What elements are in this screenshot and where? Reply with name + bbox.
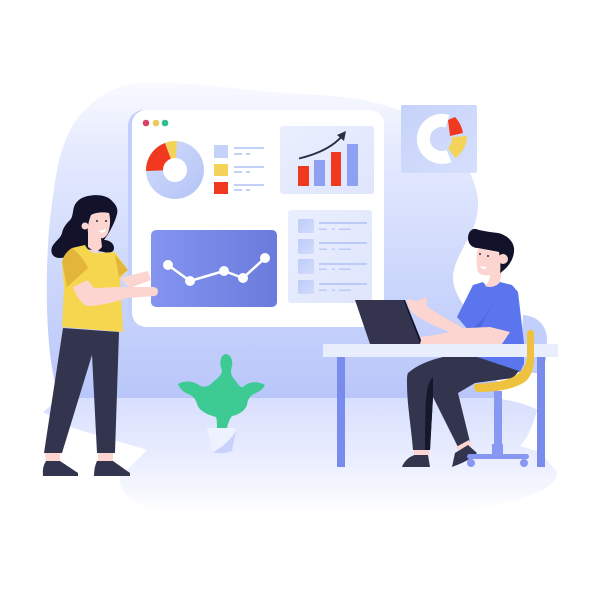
woman presenter bbox=[43, 195, 158, 476]
man hair bbox=[468, 229, 514, 273]
woman pants bbox=[44, 328, 119, 453]
plant bbox=[178, 354, 265, 453]
woman sleeves bbox=[62, 248, 128, 287]
office chair bbox=[467, 330, 534, 467]
list panel bbox=[288, 210, 372, 303]
floating donut panel bbox=[401, 105, 477, 173]
woman eyes and mouth bbox=[96, 220, 107, 233]
trend arrow bbox=[299, 131, 346, 158]
man front arm bbox=[420, 327, 510, 344]
woman front arm bbox=[73, 280, 158, 306]
man sleeve shadow bbox=[470, 303, 493, 331]
plant leaves bbox=[178, 354, 265, 428]
chair seat bbox=[474, 330, 534, 392]
woman neck and face bbox=[82, 212, 110, 253]
bar chart panel bbox=[280, 126, 374, 194]
laptop bbox=[355, 300, 421, 344]
window control dots bbox=[143, 120, 168, 126]
woman shoes bbox=[43, 461, 130, 476]
desk bbox=[323, 344, 558, 467]
woman ankles bbox=[45, 453, 113, 462]
man back arm bbox=[407, 297, 468, 332]
background wall blob bbox=[47, 83, 500, 398]
man ankles bbox=[414, 440, 472, 455]
chair back bbox=[520, 315, 547, 373]
plant pot bbox=[207, 428, 236, 453]
man presenter bbox=[402, 229, 524, 467]
man face details bbox=[479, 253, 489, 269]
man pants shadow bbox=[425, 377, 433, 450]
line chart panel bbox=[151, 230, 277, 307]
floor bbox=[43, 398, 557, 516]
man neck and face bbox=[476, 248, 502, 287]
woman shirt bbox=[62, 245, 128, 332]
man pants bbox=[407, 357, 519, 450]
chair post and base bbox=[467, 391, 529, 467]
donut chart bbox=[146, 141, 204, 199]
woman hair bbox=[51, 195, 117, 258]
dashboard screen bbox=[128, 110, 384, 327]
donut legend bbox=[214, 145, 264, 194]
man ear bbox=[498, 254, 508, 264]
man shoes bbox=[402, 445, 477, 467]
man shirt bbox=[457, 282, 524, 372]
woman back arm bbox=[120, 271, 151, 288]
